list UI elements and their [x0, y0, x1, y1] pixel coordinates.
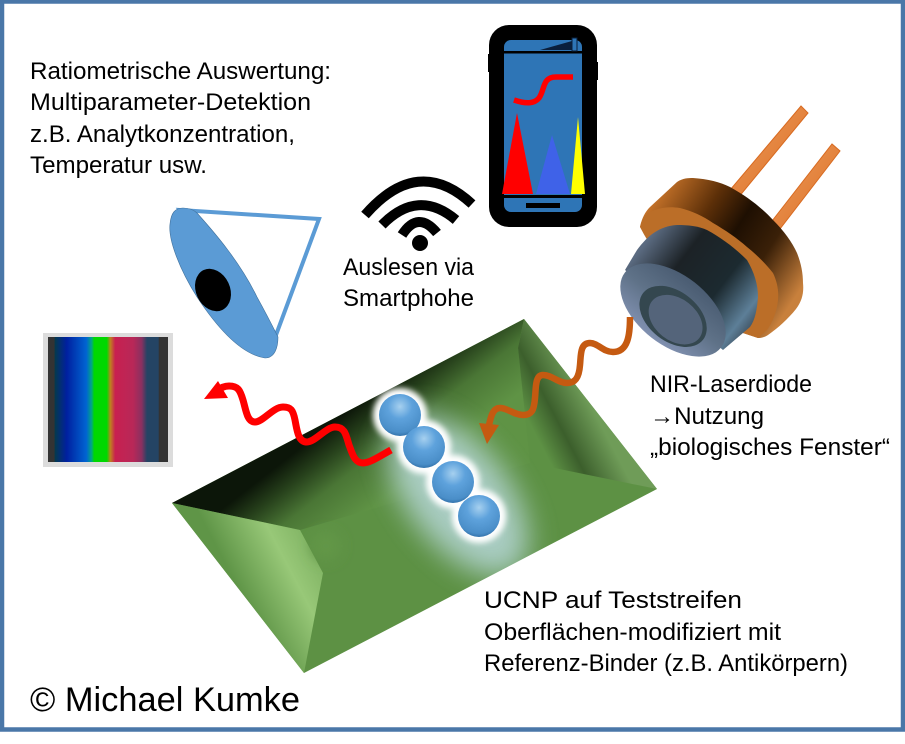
- red emission arrow: [204, 381, 391, 463]
- icon: eye: [170, 208, 319, 358]
- text: ratiometric evaluation: Ratiometrische Auswertung:: [30, 58, 331, 85]
- text: ratiometric evaluation: [30, 58, 331, 179]
- text: smartphone readout: Smartphohe: [343, 285, 474, 312]
- particle 2: [403, 426, 445, 468]
- spectrum image: [43, 333, 173, 467]
- text: laser diode: →Nutzung: [650, 403, 764, 430]
- icon: wifi: [365, 181, 472, 251]
- orange excitation arrow: [479, 317, 630, 444]
- text: laser diode: „biologisches Fenster“: [650, 434, 890, 461]
- particle 3: [432, 461, 474, 503]
- copyright: © Michael Kumke: [30, 681, 300, 719]
- metal cap face: [603, 245, 743, 375]
- text: ratiometric evaluation: Temperatur usw.: [30, 152, 207, 179]
- particle 4: [458, 495, 500, 537]
- particle 1: [379, 394, 421, 436]
- icon: smartphone: [488, 25, 598, 227]
- nanoparticles: [373, 388, 506, 543]
- text: laser diode: NIR-Laserdiode: [650, 371, 812, 398]
- copper housing: [640, 178, 803, 338]
- copper front ring: [640, 207, 778, 338]
- text: UCNP on test strip: Oberflächen-modifiziert mit: [484, 619, 781, 646]
- laser diode: [603, 106, 840, 375]
- text: ratiometric evaluation: Multiparameter-Detektion: [30, 89, 311, 116]
- text: ratiometric evaluation: z.B. Analytkonzentration,: [30, 121, 295, 148]
- text: UCNP on test strip: [484, 587, 848, 677]
- text: smartphone readout: [343, 254, 475, 312]
- metal cap body: [625, 225, 758, 350]
- text: smartphone readout: Auslesen via: [343, 254, 475, 281]
- test strip: [172, 319, 657, 673]
- text: laser diode: [650, 371, 890, 461]
- text: UCNP on test strip: Referenz-Binder (z.B. Antikörpern): [484, 650, 848, 677]
- laser pins: [725, 106, 840, 238]
- text: UCNP on test strip: UCNP auf Teststreifen: [484, 587, 742, 614]
